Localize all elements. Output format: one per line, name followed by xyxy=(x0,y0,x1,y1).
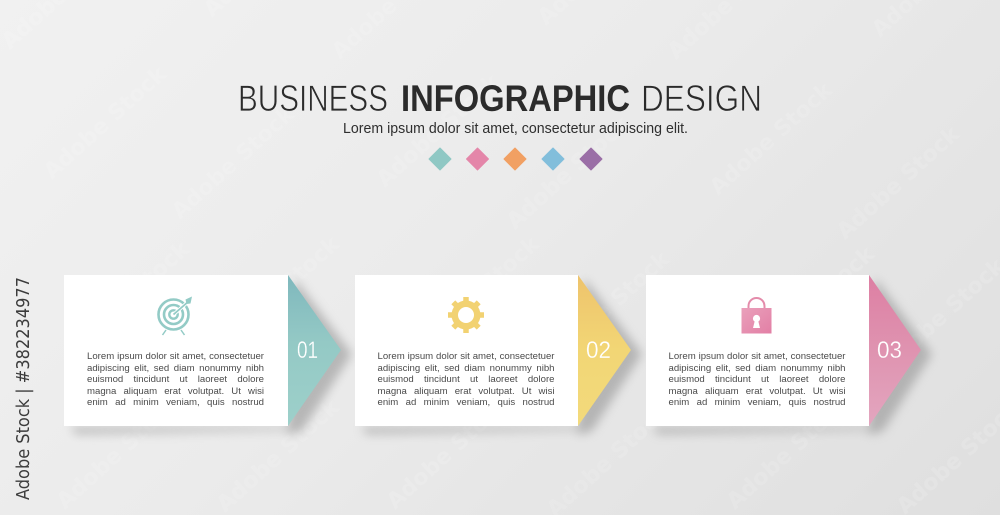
watermark pattern: Adobe Stock xyxy=(412,231,545,354)
card 1 text: Lorem ipsum dolor sit amet, consectetuer xyxy=(87,351,264,362)
card 2 text xyxy=(378,351,554,408)
icon: padlock xyxy=(742,298,772,334)
card 3 text: adipiscing elit, sed diam nonummy nibh xyxy=(668,362,846,374)
arrow 01 xyxy=(288,275,341,426)
title xyxy=(238,78,762,119)
card 1 text: euismod tincidunt ut laoreet dolore xyxy=(87,374,264,385)
card 3 text: Lorem ipsum dolor sit amet, consectetuer xyxy=(668,351,846,362)
watermark pattern: Adobe Stock xyxy=(722,391,855,514)
card 1 panel xyxy=(64,275,288,426)
card 2 shadow xyxy=(361,278,642,435)
card 2 text: magna aliquam erat volutpat. Ut wisi xyxy=(378,386,554,396)
card 3 text: magna aliquam erat volutpat. Ut wisi xyxy=(668,386,846,396)
card 3 panel xyxy=(646,275,869,426)
watermark pattern: Adobe Stock xyxy=(62,236,195,359)
watermark pattern: Adobe Stock xyxy=(382,391,515,514)
title: DESIGN xyxy=(641,78,762,119)
card 3 text: enim ad minim veniam, quis nostrud xyxy=(668,397,846,408)
icon: gear xyxy=(448,297,484,333)
subtitle: Lorem ipsum dolor sit amet, consectetur adipiscing elit. xyxy=(343,121,688,137)
watermark pattern: Adobe Stock xyxy=(52,391,185,514)
watermark pattern: Adobe Stock xyxy=(747,241,880,364)
stock credit: Adobe Stock | #382234977 xyxy=(14,277,34,500)
card 2 text: adipiscing elit, sed diam nonummy nibh xyxy=(378,362,554,374)
arrow 02 xyxy=(578,275,631,426)
card 2 text: euismod tincidunt ut laoreet dolore xyxy=(378,374,554,385)
watermark pattern: Adobe Stock xyxy=(542,246,675,369)
card 2 text: enim ad minim veniam, quis nostrud xyxy=(378,397,554,408)
card 1 text: enim ad minim veniam, quis nostrud xyxy=(87,397,264,408)
watermark pattern: Adobe Stock xyxy=(705,77,838,200)
arrow 02: 02 xyxy=(586,337,611,364)
arrow 03 xyxy=(869,275,921,426)
colour diamonds xyxy=(429,148,602,170)
card 1 text: adipiscing elit, sed diam nonummy nibh xyxy=(87,362,264,374)
card 2 text: Lorem ipsum dolor sit amet, consectetuer xyxy=(378,351,554,362)
title: BUSINESS xyxy=(238,78,388,119)
card 2 panel xyxy=(355,275,578,426)
card 1 text: magna aliquam erat volutpat. Ut wisi xyxy=(87,386,264,396)
card 1 shadow xyxy=(70,278,352,435)
watermark pattern: Adobe Stock xyxy=(212,394,345,515)
arrow 01: 01 xyxy=(297,337,318,364)
watermark pattern: Adobe Stock xyxy=(39,61,172,184)
arrow 03: 03 xyxy=(877,337,902,364)
card 3 text xyxy=(668,351,846,408)
card 1 text xyxy=(87,351,264,408)
card 3 shadow xyxy=(652,278,932,435)
icon: target xyxy=(158,296,192,335)
watermark pattern: Adobe Stock xyxy=(832,121,965,244)
watermark pattern: Adobe Stock xyxy=(372,69,505,192)
watermark pattern: Adobe Stock xyxy=(502,111,635,234)
card 3 text: euismod tincidunt ut laoreet dolore xyxy=(668,374,846,385)
watermark pattern: Adobe Stock xyxy=(212,231,345,354)
title: INFOGRAPHIC xyxy=(401,78,630,119)
watermark pattern: Adobe Stock xyxy=(167,101,300,224)
